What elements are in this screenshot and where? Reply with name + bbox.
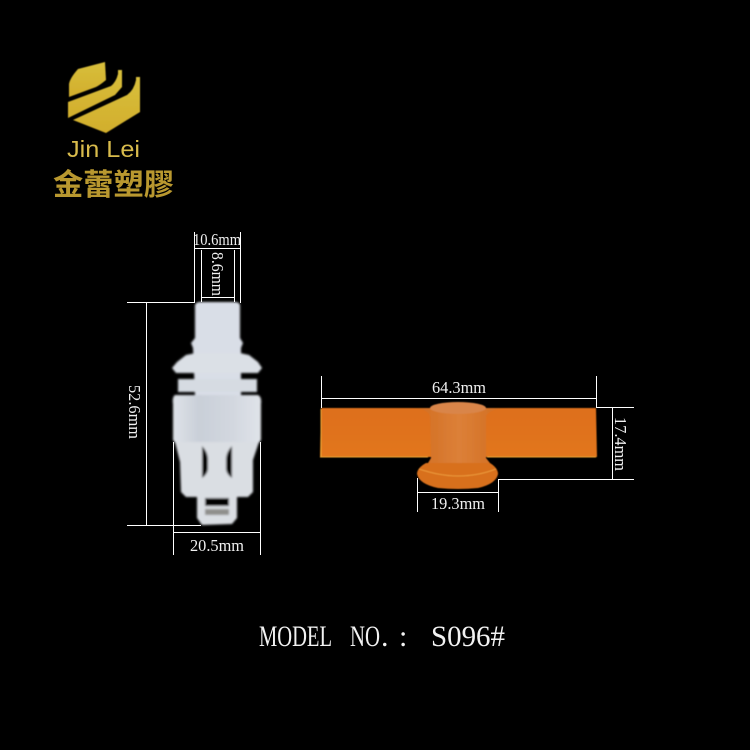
label 17.4mm: 17.4mm xyxy=(611,417,630,471)
cage xyxy=(175,442,259,525)
tip opening xyxy=(205,498,229,506)
label 20.5mm: 20.5mm xyxy=(190,536,244,555)
tip band xyxy=(205,509,229,515)
model number: . xyxy=(381,620,388,653)
dimension labels xyxy=(125,230,630,555)
cap hub xyxy=(408,408,510,463)
cap foot ring xyxy=(419,469,496,476)
lower flange xyxy=(178,379,257,392)
model number: S096# xyxy=(431,620,505,653)
logo hexagon emblem xyxy=(68,62,140,133)
cap wings xyxy=(320,408,597,457)
cage window left xyxy=(202,446,208,478)
label 10.6mm: 10.6mm xyxy=(193,230,241,249)
white spout part xyxy=(172,302,262,525)
brand logo xyxy=(53,62,174,202)
label 8.6mm: 8.6mm xyxy=(208,252,227,296)
cage window right xyxy=(226,446,232,478)
logo Chinese name: 金蕾塑膠 xyxy=(53,169,174,202)
upper flange xyxy=(172,353,262,373)
wing highlight edge xyxy=(320,409,596,457)
model number: : xyxy=(399,620,407,653)
dimension lines xyxy=(127,232,634,555)
model number: MODEL xyxy=(259,620,332,653)
collar xyxy=(173,395,261,444)
cap foot xyxy=(417,463,498,489)
logo wordmark: Jin Lei: Jin Lei xyxy=(67,136,140,162)
label 19.3mm: 19.3mm xyxy=(431,494,485,513)
model number: NO xyxy=(350,620,380,653)
orange cap part xyxy=(320,402,597,489)
model number xyxy=(259,620,505,653)
cap hub top xyxy=(430,402,486,414)
label 64.3mm: 64.3mm xyxy=(432,378,486,397)
spout neck xyxy=(191,302,243,396)
label 52.6mm: 52.6mm xyxy=(125,385,144,439)
